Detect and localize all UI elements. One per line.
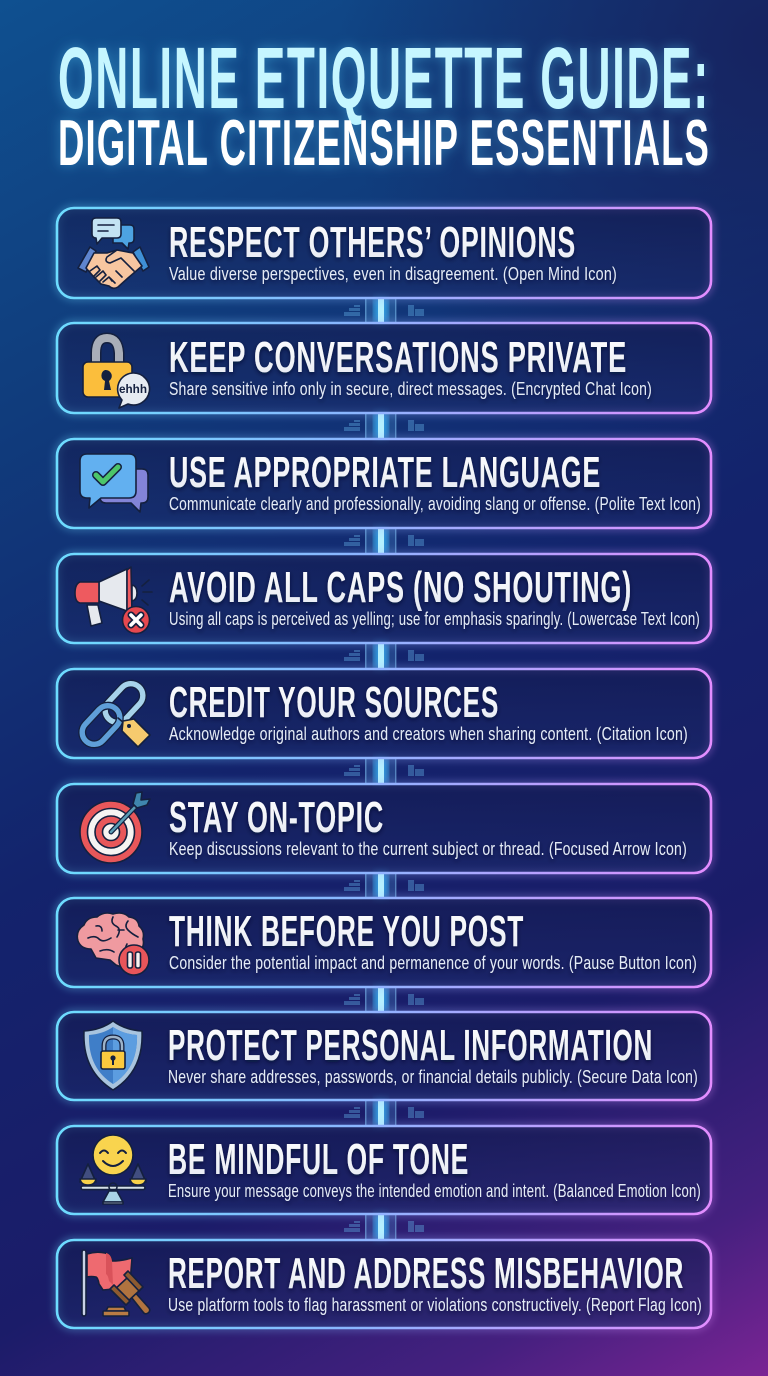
panel: think before you post bbox=[57, 898, 711, 987]
panel: avoid all caps bbox=[57, 554, 711, 643]
icon: chat bubbles with check mark bbox=[80, 454, 148, 512]
icon: brain with pause button bbox=[77, 913, 149, 975]
panel: use appropriate language bbox=[57, 439, 711, 528]
panel: stay on-topic bbox=[57, 784, 711, 873]
connector 6 bbox=[344, 873, 424, 897]
icon: chain link with tag bbox=[77, 679, 150, 749]
panel: report and address misbehavior bbox=[57, 1240, 711, 1328]
panel: credit your sources bbox=[57, 669, 711, 758]
panel: keep conversations private bbox=[57, 323, 711, 413]
title bbox=[58, 30, 710, 179]
panel: protect personal information bbox=[57, 1012, 711, 1100]
panel: respect others' opinions bbox=[57, 208, 711, 298]
icon: target with arrow bbox=[80, 792, 150, 863]
icon: smiley on balance scale bbox=[80, 1135, 146, 1204]
connector 8 bbox=[344, 1100, 424, 1125]
connector 2 bbox=[344, 413, 424, 438]
icon: flag and gavel bbox=[82, 1250, 150, 1316]
icon: handshake with speech bubbles bbox=[78, 218, 149, 288]
connector 9 bbox=[344, 1214, 424, 1239]
connector 3 bbox=[344, 528, 424, 553]
heading: STAY ON-TOPIC bbox=[169, 793, 384, 842]
heading: CREDIT YOUR SOURCES bbox=[169, 678, 499, 727]
connector 1 bbox=[344, 298, 424, 322]
icon: padlock with speech bubble bbox=[83, 338, 150, 408]
icon: megaphone with x badge bbox=[75, 567, 152, 634]
heading: BE MINDFUL OF TONE bbox=[168, 1135, 469, 1184]
connector 5 bbox=[344, 758, 424, 783]
connector 7 bbox=[344, 987, 424, 1011]
icon: padlock with speech bubble: ehhh bbox=[119, 382, 147, 396]
icon: shield with padlock bbox=[84, 1021, 142, 1090]
description: Value diverse perspectives, even in disagreement. (Open Mind Icon) bbox=[169, 264, 617, 284]
panel: be mindful of tone bbox=[57, 1126, 711, 1214]
heading: THINK BEFORE YOU POST bbox=[169, 907, 524, 956]
connector 4 bbox=[344, 643, 424, 668]
